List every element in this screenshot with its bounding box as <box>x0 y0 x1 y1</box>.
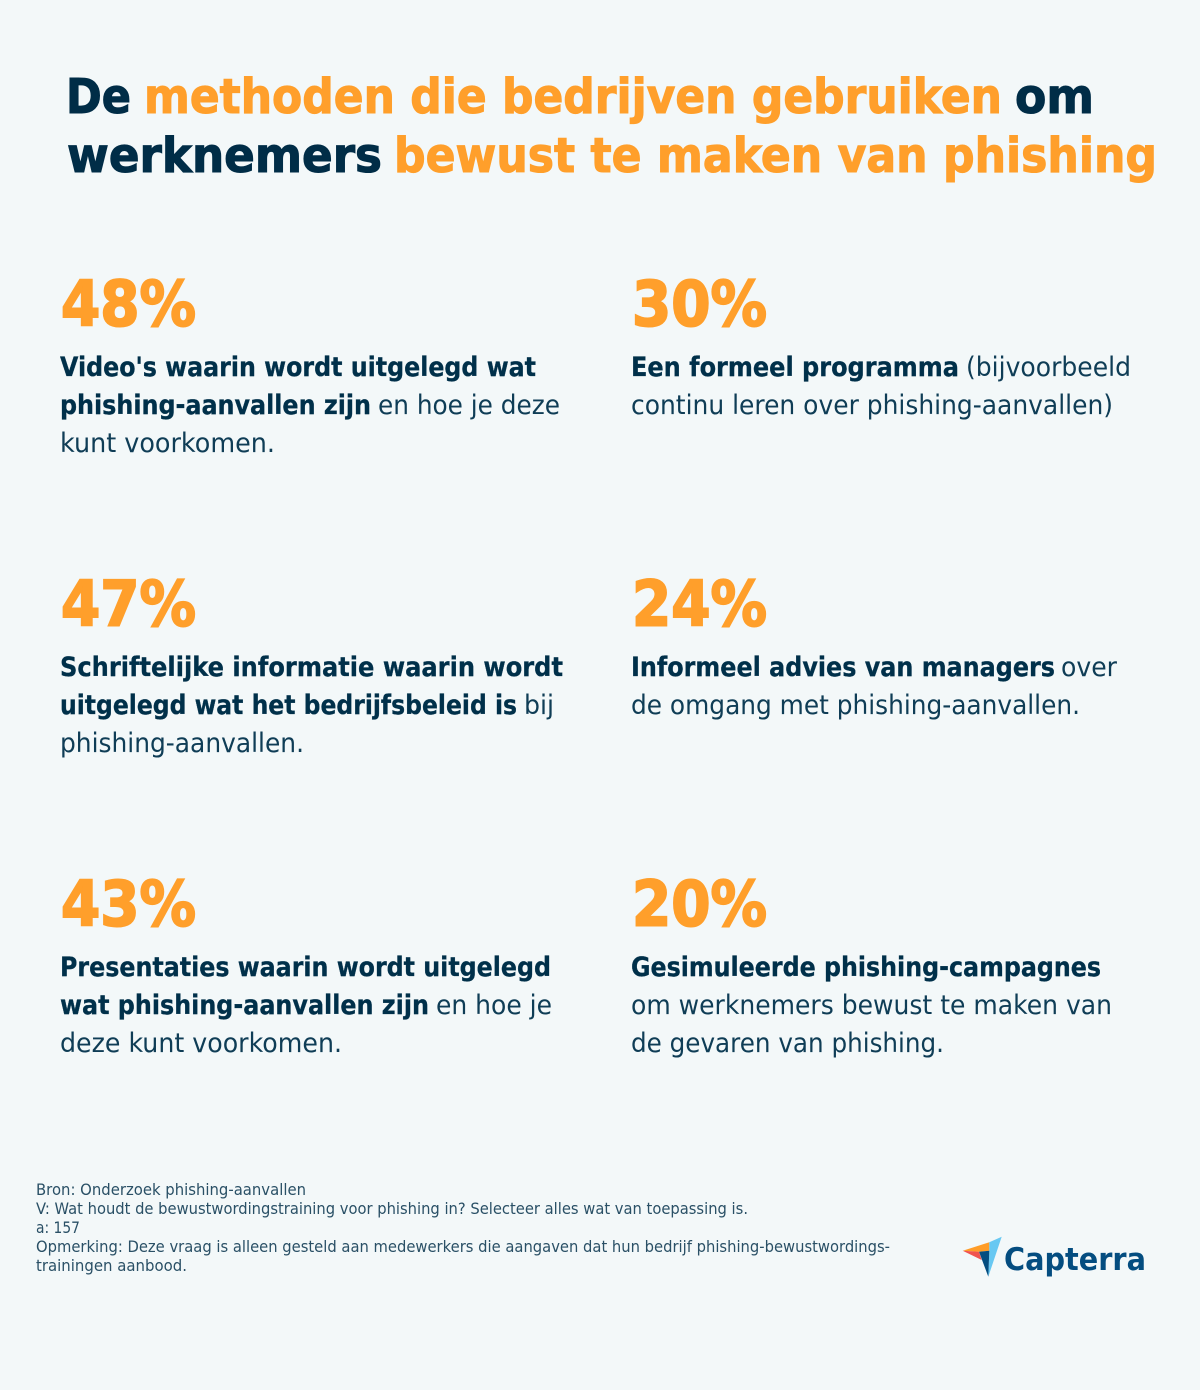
panel: 47% written information <box>60 568 563 759</box>
description: informal advice: de omgang met phishing-aanvallen. <box>631 690 1080 721</box>
panel: 43% presentations <box>60 868 552 1059</box>
description: written information: bij <box>524 690 554 721</box>
description: written information <box>60 652 563 759</box>
source note: V: Wat houdt de bewustwordingstraining voor phishing in? Selecteer alles wat van toepassing is. <box>36 1200 748 1218</box>
description: simulated campaigns <box>631 952 1112 1059</box>
statistic: 20%: 20% <box>632 868 767 940</box>
description: formal programme <box>631 352 1131 421</box>
description: videos: kunt voorkomen. <box>60 428 275 459</box>
description: videos <box>60 352 560 459</box>
description: presentations <box>60 952 552 1059</box>
panel: 20% simulated campaigns <box>631 868 1112 1059</box>
description: written information: phishing-aanvallen. <box>60 728 304 759</box>
description: formal programme: Een formeel programma <box>631 352 959 383</box>
statistic: 24%: 24% <box>632 568 767 640</box>
source note: trainingen aanbood. <box>36 1257 187 1275</box>
panel: 24% informal advice <box>631 568 1117 721</box>
description: simulated campaigns: om werknemers bewust te maken van <box>631 990 1112 1021</box>
description: informal advice <box>631 652 1117 721</box>
description: written information: Schriftelijke informatie waarin wordt <box>60 652 563 683</box>
title: werknemers <box>67 128 382 184</box>
description: simulated campaigns: Gesimuleerde phishing-campagnes <box>631 952 1101 983</box>
description: written information: uitgelegd wat het bedrijfsbeleid is <box>60 690 517 721</box>
panel: 30% formal programme <box>631 268 1131 421</box>
wordmark: Capterra <box>1004 1242 1146 1278</box>
description: informal advice: over <box>1061 652 1117 683</box>
panel: 48% videos <box>60 268 560 459</box>
description: informal advice: Informeel advies van managers <box>631 652 1055 683</box>
source note: a: 157 <box>36 1219 80 1237</box>
description: videos: Video's waarin wordt uitgelegd wat <box>60 352 536 383</box>
icon: Capterra arrow <box>963 1237 1002 1277</box>
statistic: 48%: 48% <box>61 268 196 340</box>
description: presentations: wat phishing-aanvallen zijn <box>60 990 429 1021</box>
statistic: 43%: 43% <box>61 868 196 940</box>
description: videos: phishing-aanvallen zijn <box>60 390 371 421</box>
statistic: 30%: 30% <box>632 268 767 340</box>
description: presentations: deze kunt voorkomen. <box>60 1028 342 1059</box>
title: om <box>1015 69 1094 125</box>
title: De <box>66 69 131 125</box>
source note: Bron: Onderzoek phishing-aanvallen <box>36 1181 306 1199</box>
statistic: 47%: 47% <box>61 568 196 640</box>
description: videos: en hoe je deze <box>378 390 560 421</box>
description: presentations: Presentaties waarin wordt uitgelegd <box>60 952 551 983</box>
source note <box>36 1181 890 1275</box>
description: presentations: en hoe je <box>436 990 552 1021</box>
description: formal programme: (bijvoorbeeld <box>966 352 1131 383</box>
title: bewust te maken van phishing <box>394 128 1157 184</box>
description: simulated campaigns: de gevaren van phishing. <box>631 1028 944 1059</box>
title <box>66 69 1157 184</box>
logo: Capterra <box>963 1237 1146 1278</box>
description: formal programme: continu leren over phishing-aanvallen) <box>631 390 1113 421</box>
source note: Opmerking: Deze vraag is alleen gesteld aan medewerkers die aangaven dat hun bedrijf phishing-bewustwordings- <box>36 1238 890 1256</box>
title: methoden die bedrijven gebruiken <box>144 69 1002 125</box>
